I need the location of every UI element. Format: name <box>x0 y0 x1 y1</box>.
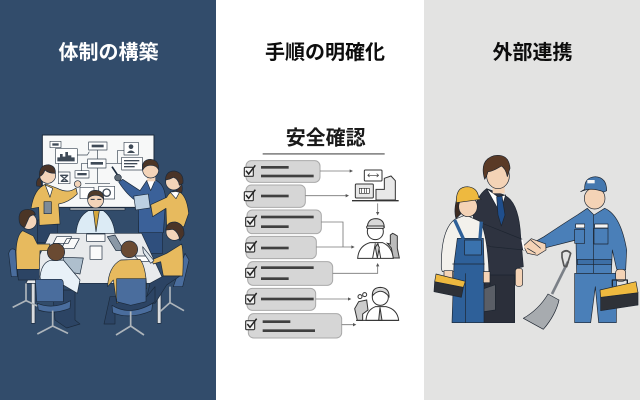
person: seated front right <box>104 241 155 335</box>
heading: 外部連携: 外部連携 <box>492 40 572 64</box>
heading: 手順の明確化: 手順の明確化 <box>265 41 385 64</box>
panel: 手順の明確化 <box>216 0 424 400</box>
panel: 外部連携 <box>424 0 640 400</box>
panel: 体制の構築 <box>0 0 216 400</box>
illustration: team meeting <box>9 135 189 335</box>
illustration: handshake between partners <box>434 155 638 329</box>
person: seated left <box>9 209 50 307</box>
icon: handshake <box>522 239 546 255</box>
person: woman in overalls <box>441 187 490 323</box>
person: worker in blue coveralls <box>523 177 627 323</box>
person: standing man presenting <box>112 159 166 253</box>
person: standing woman left <box>31 165 81 243</box>
person: central leader <box>76 190 115 233</box>
subheading: 安全確認: 安全確認 <box>286 127 366 150</box>
icon: left toolbox <box>434 274 465 297</box>
person: standing woman right <box>151 171 189 227</box>
icon: briefcase <box>482 282 495 312</box>
person: man in suit <box>473 155 524 323</box>
icon: shovel <box>523 251 571 329</box>
connector arrows <box>305 169 379 326</box>
illustration: safety check flow <box>244 127 399 338</box>
heading: 体制の構築: 体制の構築 <box>58 41 158 64</box>
checklist rows <box>244 161 342 338</box>
person: seated front left <box>35 243 83 334</box>
icon: documents and buildings <box>352 170 399 201</box>
whiteboard <box>42 135 154 210</box>
person: seated right <box>143 222 189 312</box>
icon: right toolbox <box>600 280 638 311</box>
meeting table <box>26 233 165 323</box>
icon: worker with raised hand <box>358 219 399 258</box>
icon: person with tools <box>355 287 399 320</box>
